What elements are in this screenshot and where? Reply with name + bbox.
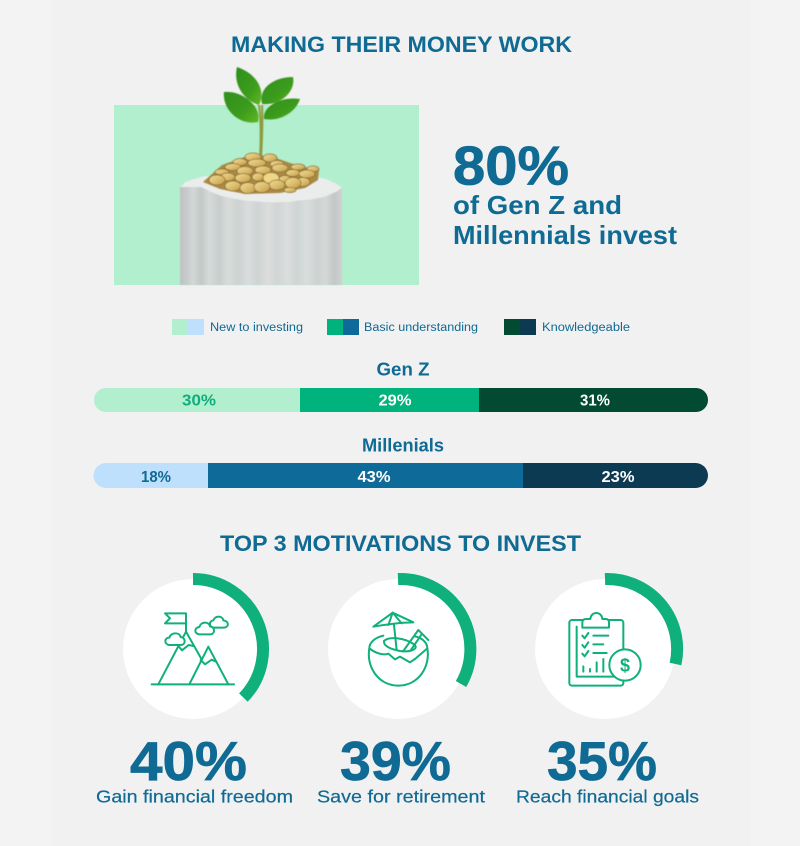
panel: plant on coins illustration bbox=[114, 67, 419, 285]
legend: knowledgeable: Knowledgeable bbox=[542, 322, 630, 334]
Millenials segment 23% bbox=[523, 463, 708, 488]
legend: basic understanding: Basic understanding bbox=[364, 322, 478, 334]
Gen Z segment 31% bbox=[479, 388, 708, 412]
caption: Gain financial freedom bbox=[96, 786, 293, 806]
Gen Z segment 30%: 30% bbox=[182, 392, 216, 410]
coin pile bbox=[203, 153, 319, 194]
headline stat bbox=[453, 134, 677, 250]
stat caption: of Gen Z and bbox=[453, 190, 622, 220]
white disc bbox=[535, 579, 675, 719]
legend: knowledgeable bbox=[504, 319, 630, 335]
green backdrop bbox=[114, 105, 419, 285]
Gen Z segment 30% bbox=[94, 388, 300, 412]
title: MAKING THEIR MONEY WORK bbox=[231, 32, 572, 57]
Gen Z label: Gen Z bbox=[376, 360, 430, 380]
Millenials segment 18% bbox=[93, 463, 208, 488]
fluted column bbox=[180, 175, 342, 285]
stat caption: Millennials invest bbox=[453, 220, 677, 250]
progress arc 35% bbox=[605, 579, 677, 664]
motivation 3: reach financial goals bbox=[516, 579, 699, 806]
35% figure: 35% bbox=[547, 730, 657, 792]
white disc bbox=[328, 579, 468, 719]
Millenials label: Millenials bbox=[362, 436, 444, 456]
caption: Save for retirement bbox=[317, 786, 485, 806]
white disc bbox=[123, 579, 263, 719]
Gen Z segment 29% bbox=[300, 388, 479, 412]
Millenials segment 43%: 43% bbox=[358, 469, 390, 486]
icon: coconut drink with umbrella bbox=[369, 613, 428, 686]
legend: new to investing: New to investing bbox=[210, 322, 303, 334]
Gen Z segment 31%: 31% bbox=[580, 392, 610, 410]
legend bbox=[172, 319, 630, 335]
chart: Gen Z bar bbox=[94, 360, 708, 412]
motivation 2: save for retirement bbox=[317, 579, 485, 806]
icon: clipboard with checklist and dollar coin bbox=[569, 613, 641, 686]
legend: new to investing bbox=[172, 319, 303, 335]
Millenials segment 43% bbox=[208, 463, 524, 488]
progress arc 40% bbox=[193, 579, 263, 698]
dollar sign: $ bbox=[620, 656, 630, 676]
legend: basic understanding bbox=[327, 319, 478, 335]
progress arc 39% bbox=[398, 579, 470, 684]
40% figure: 40% bbox=[130, 730, 247, 792]
section heading: top 3 motivations: TOP 3 MOTIVATIONS TO INVEST bbox=[220, 531, 582, 556]
caption: Reach financial goals bbox=[516, 786, 699, 806]
Millenials segment 18%: 18% bbox=[141, 469, 171, 486]
Millenials segment 23%: 23% bbox=[602, 469, 634, 486]
80% figure: 80% bbox=[453, 134, 569, 196]
icon: mountains with flag and clouds bbox=[152, 613, 234, 684]
plant stem and leaves bbox=[224, 67, 300, 158]
stat caption bbox=[453, 190, 677, 250]
Gen Z segment 29%: 29% bbox=[378, 392, 412, 410]
chart: Millenials bar bbox=[93, 436, 708, 488]
39% figure: 39% bbox=[340, 730, 451, 792]
motivation 1: gain financial freedom bbox=[96, 579, 293, 806]
